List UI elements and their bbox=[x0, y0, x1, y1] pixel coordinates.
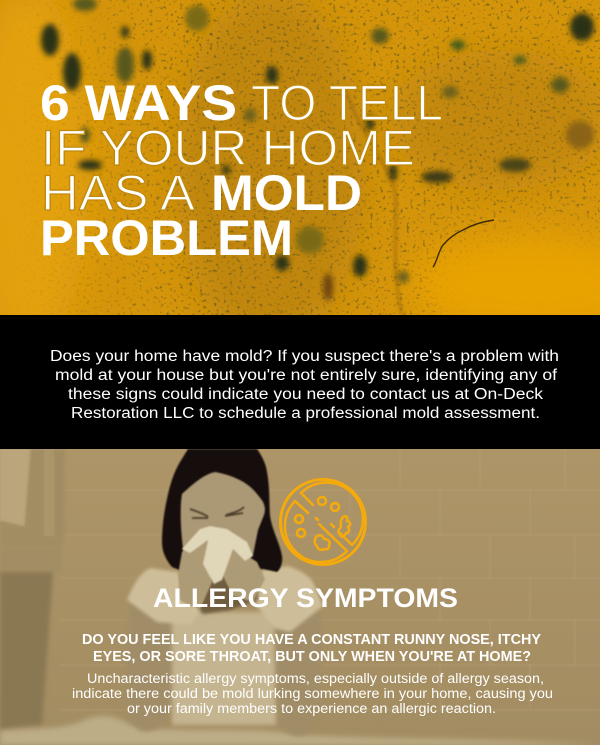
icon: no allergens bbox=[280, 480, 366, 564]
mold patches bbox=[41, 0, 594, 301]
hands bbox=[178, 550, 212, 609]
heading: allergy symptoms: ALLERGY SYMPTOMS bbox=[153, 583, 458, 613]
body text: or your family members to experience an allergic reaction. bbox=[127, 701, 496, 716]
title: 6 WAYS bbox=[40, 75, 237, 131]
wall ridge bbox=[345, 90, 402, 315]
title: TO TELL bbox=[251, 75, 443, 131]
intro band bbox=[0, 315, 600, 449]
body text: Uncharacteristic allergy symptoms, especially outside of allergy season, bbox=[87, 671, 544, 686]
intro text: Does your home have mold? If you suspect there's a problem with bbox=[50, 348, 559, 365]
title: MOLD bbox=[211, 165, 362, 221]
subheading question: EYES, OR SORE THROAT, BUT ONLY WHEN YOU'RE AT HOME? bbox=[93, 649, 531, 665]
intro text: these signs could indicate you need to contact us at On-Deck bbox=[68, 386, 543, 403]
intro text: mold at your house but you're not entirely sure, identifying any of bbox=[55, 367, 558, 384]
subheading question bbox=[82, 632, 541, 665]
neck bbox=[198, 576, 260, 616]
wall crack bbox=[433, 220, 494, 267]
title: HAS A bbox=[41, 165, 196, 221]
body text: indicate there could be mold lurking somewhere in your home, causing you bbox=[72, 686, 553, 701]
shirt sleeves bbox=[127, 568, 200, 625]
face bbox=[180, 471, 266, 556]
intro text: Restoration LLC to schedule a professional mold assessment. bbox=[71, 405, 540, 422]
torso bbox=[172, 612, 276, 725]
eyes bbox=[190, 507, 244, 518]
hero panel: mold on wall bbox=[0, 0, 600, 350]
arms bbox=[128, 619, 170, 733]
hair bbox=[162, 449, 282, 572]
title: PROBLEM bbox=[40, 210, 293, 266]
window bbox=[0, 449, 31, 527]
title: IF YOUR HOME bbox=[41, 120, 415, 176]
bed bbox=[0, 716, 600, 745]
title bbox=[40, 75, 443, 266]
body text bbox=[72, 671, 553, 716]
intro text bbox=[50, 348, 559, 422]
tissue bbox=[182, 526, 253, 584]
brick wall bbox=[440, 578, 576, 710]
photo panel: woman sneezing bbox=[0, 449, 600, 745]
subheading question: DO YOU FEEL LIKE YOU HAVE A CONSTANT RUNNY NOSE, ITCHY bbox=[82, 632, 541, 648]
